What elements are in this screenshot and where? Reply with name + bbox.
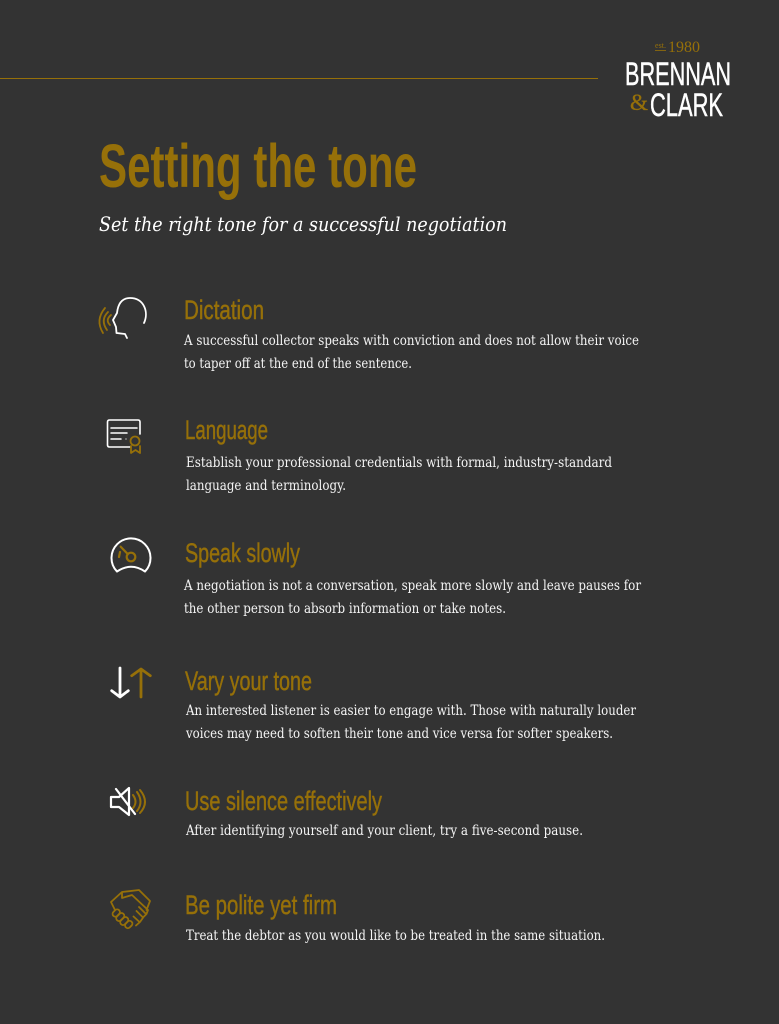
logo: & (630, 90, 648, 115)
body text: the other person to absorb information or take notes. (184, 601, 506, 617)
body text (186, 455, 612, 494)
title: Setting the tone (99, 132, 417, 200)
panel: dictation (99, 295, 639, 372)
logo: 1980 (668, 39, 700, 56)
heading: Use silence effectively (185, 786, 382, 816)
icon: speaking head (99, 298, 146, 338)
panel: use silence effectively (111, 786, 583, 839)
panel: vary your tone (112, 666, 636, 742)
body text: An interested listener is easier to engage with. Those with naturally louder (185, 703, 636, 719)
logo: BRENNAN (625, 56, 731, 92)
body text (183, 333, 639, 372)
body text: language and terminology. (186, 478, 346, 494)
icon: muted speaker (111, 788, 145, 815)
panel: language (108, 415, 612, 494)
body text (185, 703, 636, 742)
logo: CLARK (650, 87, 723, 123)
heading: Vary your tone (185, 666, 312, 696)
subtitle: Set the right tone for a successful negotiation (99, 213, 507, 236)
body text (183, 578, 641, 617)
heading: Language (185, 415, 268, 445)
panel: speak slowly (112, 538, 641, 617)
logo (625, 39, 731, 123)
icon: speedometer (112, 538, 151, 572)
icon: up and down arrows (112, 668, 150, 697)
heading: Speak slowly (185, 538, 300, 568)
icon: handshake (111, 890, 150, 929)
heading: Dictation (184, 295, 264, 325)
logo: est. (655, 41, 666, 50)
body text: Establish your professional credentials with formal, industry-standard (186, 455, 612, 471)
body text: Treat the debtor as you would like to be treated in the same situation. (186, 928, 605, 944)
heading: Be polite yet firm (185, 890, 337, 920)
body text: A successful collector speaks with conviction and does not allow their voice (183, 333, 639, 349)
body text: After identifying yourself and your client, try a five-second pause. (185, 823, 583, 839)
icon: certificate (108, 420, 140, 453)
body text: to taper off at the end of the sentence. (184, 356, 412, 372)
body text: A negotiation is not a conversation, speak more slowly and leave pauses for (183, 578, 641, 594)
body text: voices may need to soften their tone and vice versa for softer speakers. (185, 726, 613, 742)
panel: be polite yet firm (111, 890, 605, 944)
